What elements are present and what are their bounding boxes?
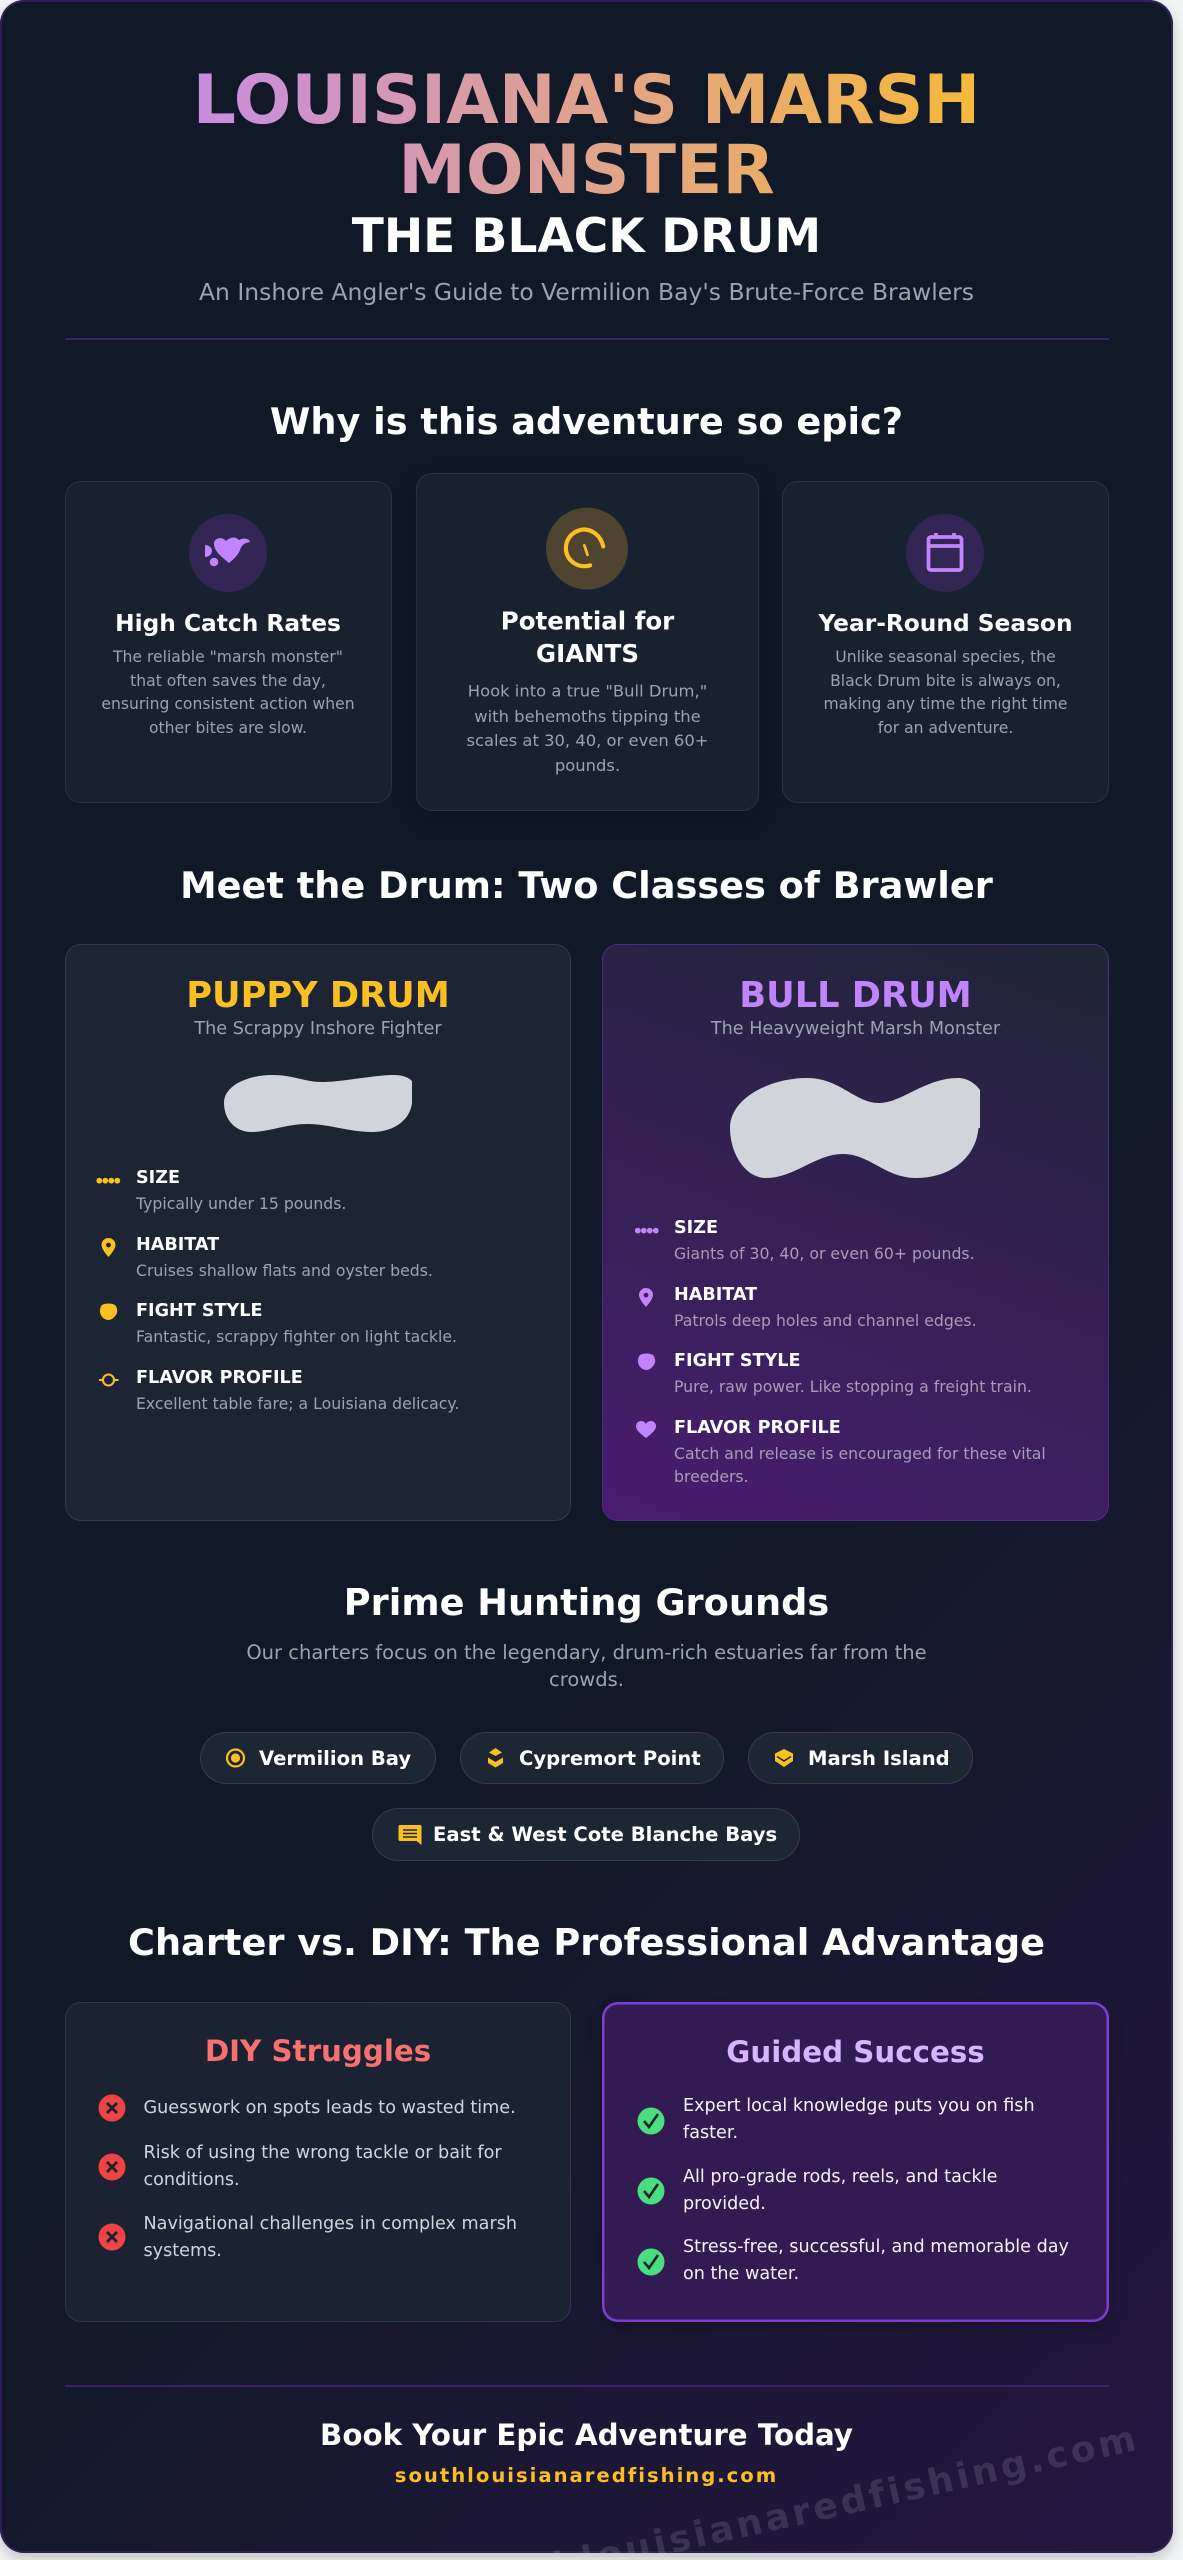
diy point 3: systems. — [144, 2241, 222, 2261]
panel: year-round season — [782, 481, 1109, 803]
guided point 2 — [683, 2167, 997, 2214]
pill: vermilion bay: Vermilion Bay — [259, 1747, 411, 1770]
diy point 3: Navigational challenges in complex marsh — [144, 2214, 517, 2234]
panel: potential for giants — [415, 473, 759, 811]
bull icons — [634, 1228, 659, 1438]
diy point 1: Guesswork on spots leads to wasted time. — [144, 2098, 516, 2118]
bull habitat: HABITAT — [674, 1285, 757, 1305]
footer heading: Book Your Epic Adventure Today — [320, 2418, 853, 2452]
footer url: southlouisianaredfishing.com — [395, 2464, 778, 2487]
guided point 1: faster. — [683, 2123, 738, 2143]
card heading: Year-Round Season — [818, 610, 1073, 636]
guided check icons — [638, 2108, 664, 2276]
bull fight style: FIGHT STYLE — [674, 1351, 800, 1371]
card description: that often saves the day, — [130, 672, 326, 690]
puppy drum tagline: The Scrappy Inshore Fighter — [194, 1019, 442, 1039]
panel: puppy drum: Cruises shallow flats and oyster beds. — [136, 1261, 433, 1280]
puppy habitat: HABITAT — [136, 1235, 219, 1255]
guided point 2: provided. — [683, 2194, 766, 2214]
icon: heart — [189, 514, 267, 592]
pill: marsh island — [748, 1732, 973, 1784]
guided point 3 — [683, 2237, 1069, 2284]
guided point 2: All pro-grade rods, reels, and tackle — [683, 2167, 997, 2187]
card description — [466, 682, 708, 775]
puppy fight style: FIGHT STYLE — [136, 1301, 262, 1321]
icon: message — [398, 1825, 422, 1845]
pill: cote blanche bays — [372, 1808, 800, 1861]
pill: marsh island: Marsh Island — [808, 1747, 950, 1770]
hunting grounds intro: Our charters focus on the legendary, drum-rich estuaries far from the — [246, 1641, 927, 1664]
card description: Hook into a true "Bull Drum," — [467, 682, 707, 701]
card description: pounds. — [554, 756, 620, 775]
hunting grounds intro — [246, 1641, 927, 1691]
puppy fish silhouette — [224, 1075, 412, 1132]
card description: with behemoths tipping the — [474, 707, 700, 725]
tagline: An Inshore Angler's Guide to Vermilion Bay's Brute-Force Brawlers — [199, 278, 974, 306]
card description: scales at 30, 40, or even 60+ — [466, 731, 708, 750]
guided point 3: on the water. — [683, 2264, 799, 2284]
diy point 3 — [144, 2214, 517, 2261]
diy point 2: conditions. — [144, 2170, 240, 2190]
guided point 1: Expert local knowledge puts you on fish — [683, 2096, 1035, 2116]
heading: meet the drum: Meet the Drum: Two Classes of Brawler — [180, 864, 993, 906]
icon: gauge — [546, 508, 627, 590]
card description: The reliable "marsh monster" — [113, 648, 343, 666]
icon: calendar — [906, 514, 984, 592]
icon: target — [226, 1748, 246, 1768]
card description: other bites are slow. — [149, 718, 307, 736]
panel: guided success — [602, 2002, 1109, 2322]
card heading: High Catch Rates — [115, 610, 341, 636]
bull drum tagline: The Heavyweight Marsh Monster — [711, 1019, 1000, 1039]
card heading: Potential for — [500, 607, 674, 635]
card description — [823, 648, 1068, 736]
bull fish silhouette — [730, 1078, 980, 1178]
diy x icons — [98, 2094, 126, 2250]
panel: puppy drum: Fantastic, scrappy fighter on light tackle. — [136, 1327, 457, 1346]
guided point 3: Stress-free, successful, and memorable day — [683, 2237, 1069, 2257]
diy point 2: Risk of using the wrong tackle or bait for — [144, 2143, 502, 2163]
card description: Black Drum bite is always on, — [830, 672, 1061, 690]
card heading — [500, 607, 674, 668]
subtitle: the black drum: THE BLACK DRUM — [352, 208, 821, 264]
puppy icons — [96, 1178, 120, 1386]
pill: cote blanche bays: East & West Cote Blanche Bays — [433, 1823, 777, 1846]
diy point 2 — [144, 2143, 502, 2190]
pill: vermilion bay — [200, 1732, 436, 1784]
title: MONSTER — [398, 130, 775, 210]
heading: why epic: Why is this adventure so epic? — [270, 400, 903, 443]
panel: puppy drum: Typically under 15 pounds. — [136, 1194, 346, 1213]
pill: cypremort point — [460, 1732, 724, 1784]
panel: bull drum: Pure, raw power. Like stopping a freight train. — [674, 1377, 1032, 1396]
panel: bull drum: breeders. — [674, 1467, 749, 1486]
title — [193, 60, 980, 210]
pill: cypremort point: Cypremort Point — [519, 1747, 701, 1770]
panel: puppy drum: Excellent table fare; a Louisiana delicacy. — [136, 1394, 459, 1413]
title: LOUISIANA'S MARSH — [193, 60, 980, 140]
panel: bull drum: Giants of 30, 40, or even 60+ pounds. — [674, 1244, 975, 1263]
card description: making any time the right time — [823, 695, 1068, 713]
guided point 1 — [683, 2096, 1035, 2143]
panel: bull drum: Catch and release is encouraged for these vital — [674, 1444, 1046, 1463]
diy heading: DIY Struggles — [205, 2034, 431, 2068]
icon: shield — [775, 1749, 793, 1767]
puppy drum name: PUPPY DRUM — [186, 974, 450, 1016]
panel: puppy drum — [65, 944, 571, 1521]
hunting grounds intro: crowds. — [549, 1668, 624, 1691]
icon: chevrons — [488, 1748, 503, 1768]
heading: charter vs diy: Charter vs. DIY: The Professional Advantage — [128, 1921, 1045, 1964]
card description — [101, 648, 355, 736]
card heading: GIANTS — [536, 639, 638, 668]
puppy size: SIZE — [136, 1168, 180, 1188]
card description: for an adventure. — [878, 718, 1013, 736]
guided heading: Guided Success — [726, 2034, 985, 2068]
puppy flavor profile: FLAVOR PROFILE — [136, 1368, 303, 1388]
panel: bull drum — [602, 944, 1109, 1521]
bull size: SIZE — [674, 1218, 718, 1238]
heading: prime hunting grounds: Prime Hunting Grounds — [344, 1581, 829, 1624]
card description: ensuring consistent action when — [101, 695, 355, 713]
card description: Unlike seasonal species, the — [835, 648, 1056, 666]
panel: bull drum: Patrols deep holes and channel edges. — [674, 1311, 977, 1330]
panel: high catch rates — [65, 481, 392, 803]
bull flavor profile: FLAVOR PROFILE — [674, 1418, 841, 1438]
panel: diy struggles — [65, 2002, 571, 2322]
bull drum name: BULL DRUM — [739, 974, 972, 1016]
